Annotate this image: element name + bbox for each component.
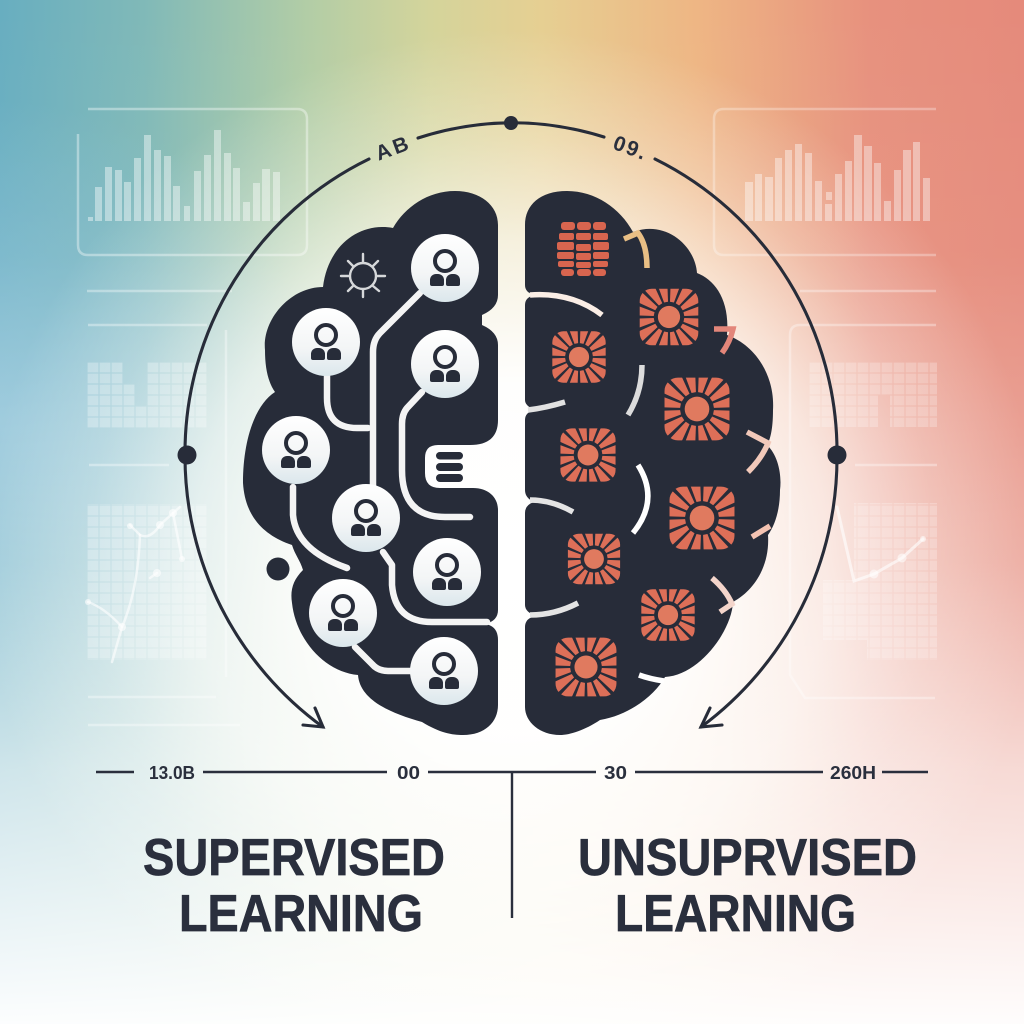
left brain silhouette: [243, 191, 498, 735]
icon: list bars: [436, 452, 463, 482]
left line chart: [85, 507, 185, 662]
right rules: [790, 291, 937, 698]
arc label 09.: 09.: [610, 132, 651, 165]
axis label 00: 00: [397, 763, 420, 783]
heading: supervised learning: SUPERVISED: [143, 829, 445, 887]
right bar chart: [745, 135, 930, 221]
heading: supervised learning: LEARNING: [179, 885, 423, 943]
left line chart grid: [87, 504, 207, 660]
heading: unsupervised learning: [578, 829, 917, 943]
left arc: [185, 159, 369, 727]
arc dots: [178, 116, 846, 464]
connector lines: [293, 293, 487, 671]
left bar chart: [88, 130, 280, 221]
right arrowhead: [701, 708, 722, 727]
right bar chart frame: [714, 109, 936, 255]
axis line segments: [96, 772, 928, 918]
heading: unsupervised learning: UNSUPRVISED: [578, 829, 917, 887]
connector arcs: [528, 233, 770, 681]
top arc segment: [418, 123, 604, 138]
axis label 13.0B: 13.0B: [149, 763, 195, 783]
icon: sun: [341, 254, 385, 297]
left rules: [87, 291, 240, 725]
right brain silhouette: [525, 191, 780, 735]
heading: supervised learning: [143, 829, 445, 943]
circular arc with arrows and dots: [178, 116, 846, 727]
axis label 260H: 260H: [830, 763, 876, 783]
right brain: unsupervised: [525, 191, 780, 735]
heading: unsupervised learning: LEARNING: [615, 885, 856, 943]
right line chart: [837, 507, 926, 581]
small dark dot: [266, 558, 290, 580]
left arrowhead: [303, 708, 323, 727]
left faint dashboard panel: [78, 109, 307, 725]
right heat grid: [809, 362, 937, 427]
axis label 30: 30: [604, 763, 627, 783]
left brain: supervised: [243, 191, 498, 735]
right line chart grid: [823, 503, 937, 660]
left heat grid: [87, 362, 207, 428]
right faint dashboard panel: [714, 109, 937, 698]
arc label AB: AB: [373, 131, 415, 165]
timeline axis: [96, 763, 928, 918]
person nodes: [262, 234, 481, 705]
icon: grid cluster: [557, 222, 609, 276]
flower cluster icons: [536, 270, 754, 716]
right arc: [655, 159, 837, 727]
left bar chart frame: [78, 109, 307, 255]
